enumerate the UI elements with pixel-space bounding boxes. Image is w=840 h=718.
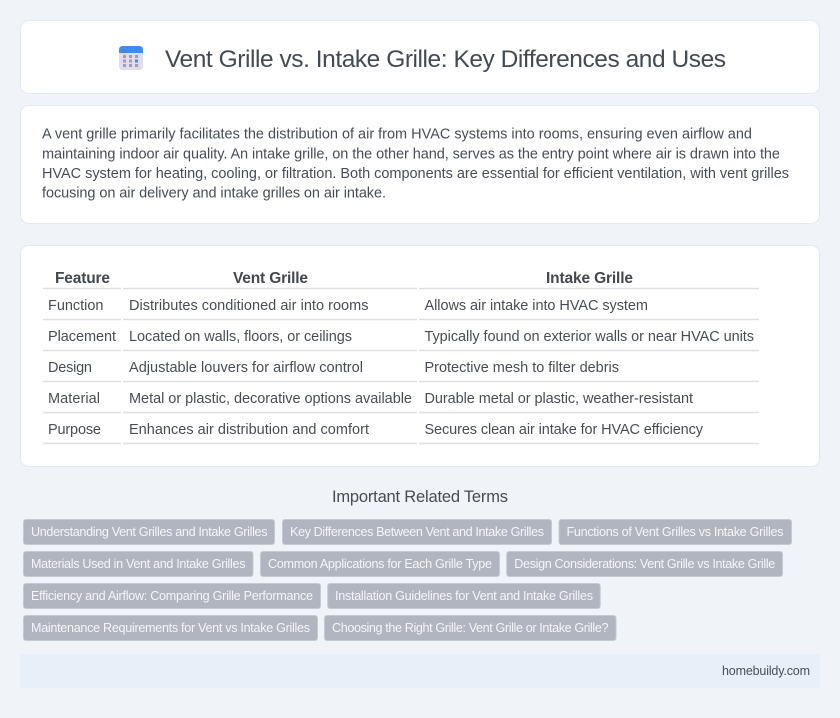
tag <box>282 520 552 544</box>
table row: design <box>43 360 759 382</box>
table row: purpose: Purpose <box>48 422 101 438</box>
tag: Maintenance Requirements for Vent vs Intake Grilles <box>31 621 310 635</box>
panel: introduction <box>20 106 820 224</box>
title: Vent Grille vs. Intake Grille: Key Differences and Uses <box>165 46 726 73</box>
table row: material <box>43 391 759 412</box>
tag: Efficiency and Airflow: Comparing Grille Performance <box>31 589 313 603</box>
table row: function: Function <box>48 298 104 314</box>
intro paragraph <box>42 127 789 202</box>
table row: design: Design <box>48 360 92 376</box>
intro paragraph: maintaining indoor air quality. An intake grille, on the other hand, serves as the entry point where air is drawn into the <box>42 146 780 162</box>
tag <box>24 584 320 608</box>
tag <box>260 552 500 576</box>
table row: placement: Typically found on exterior walls or near HVAC units <box>424 329 754 345</box>
table row: placement: Located on walls, floors, or ceilings <box>129 329 352 345</box>
tag <box>324 616 616 640</box>
footer bar <box>20 654 820 688</box>
tag: Materials Used in Vent and Intake Grilles <box>31 557 246 571</box>
heading: important related terms: Important Related Terms <box>332 488 508 506</box>
tag: Choosing the Right Grille: Vent Grille or Intake Grille? <box>332 621 608 635</box>
tag: Design Considerations: Vent Grille vs Intake Grille <box>514 557 775 571</box>
table row: function: Allows air intake into HVAC system <box>424 298 648 314</box>
table row: purpose: Enhances air distribution and comfort <box>129 422 369 438</box>
panel: comparison table <box>20 246 820 466</box>
tag <box>24 616 318 640</box>
tag: Common Applications for Each Grille Type <box>268 557 492 571</box>
table row: design: Adjustable louvers for airflow control <box>129 360 363 376</box>
table row: material: Metal or plastic, decorative options available <box>129 391 412 407</box>
table row: function: Distributes conditioned air into rooms <box>129 298 368 314</box>
tag <box>559 520 792 544</box>
icon: calendar grid <box>119 46 143 70</box>
tag: Key Differences Between Vent and Intake Grilles <box>290 525 544 539</box>
header panel <box>20 20 820 94</box>
intro paragraph: A vent grille primarily facilitates the distribution of air from HVAC systems into rooms, ensuring even airflow and <box>42 127 752 143</box>
related term tags <box>24 520 792 640</box>
table header row: Vent Grille <box>233 270 308 287</box>
tag <box>24 520 274 544</box>
table row: purpose <box>43 422 759 444</box>
intro paragraph: focusing on air delivery and intake grilles on air intake. <box>42 186 386 202</box>
table header row: Feature <box>55 270 110 287</box>
footer domain: homebuildy.com <box>722 664 810 678</box>
table row: design: Protective mesh to filter debris <box>424 360 619 376</box>
table row: placement <box>43 329 759 350</box>
table row: material: Durable metal or plastic, weather-resistant <box>424 391 693 407</box>
intro paragraph: HVAC system for heating, cooling, or filtration. Both components are essential for efficient ventilation, with vent grilles <box>42 166 789 182</box>
tag <box>328 584 600 608</box>
table row: function <box>43 298 759 320</box>
table header row: Intake Grille <box>546 270 633 287</box>
table row: placement: Placement <box>48 329 116 345</box>
tag: Understanding Vent Grilles and Intake Grilles <box>31 525 268 539</box>
table row: material: Material <box>48 391 100 407</box>
table row: purpose: Secures clean air intake for HVAC efficiency <box>424 422 704 438</box>
tag: Installation Guidelines for Vent and Intake Grilles <box>335 589 593 603</box>
tag <box>507 552 782 576</box>
tag: Functions of Vent Grilles vs Intake Grilles <box>566 525 784 539</box>
table header row <box>43 270 759 288</box>
tag <box>24 552 253 576</box>
